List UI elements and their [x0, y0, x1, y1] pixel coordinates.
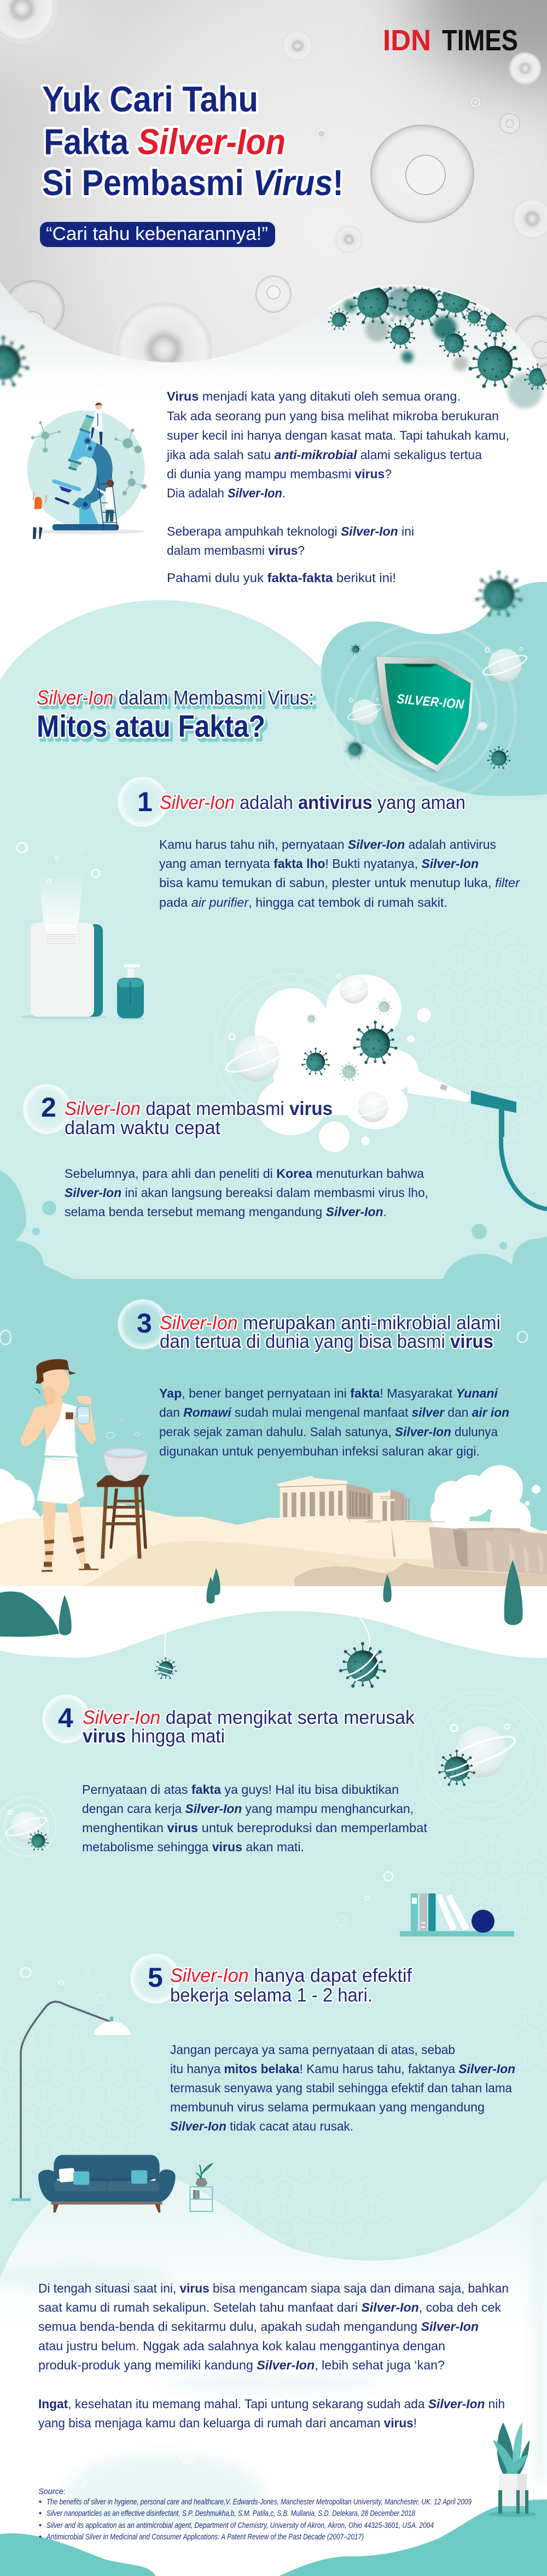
- panel: teal sky section with cloud edges: [0, 1170, 547, 1591]
- illustration: sofa: [38, 2155, 176, 2213]
- cloud: [255, 975, 471, 1152]
- body 5: [170, 2043, 515, 2133]
- icon: planets and viruses: [345, 644, 528, 769]
- bubble: [130, 1953, 181, 2004]
- logo: IDN Times: TIMES: [442, 24, 518, 57]
- body 1: Kamu harus tahu nih, pernyataan Silver-Ion adalah antivirus: [159, 837, 496, 852]
- trees and bush: [0, 1560, 523, 1637]
- head: [34, 1359, 76, 1405]
- scientist woman: [33, 492, 46, 539]
- icon: blurred virus left: [0, 336, 30, 387]
- heading: Silver-Ion dalam Membasmi Virus: Silver-Ion dalam Membasmi Virus:: [37, 686, 314, 709]
- pale bubbles: [0, 2448, 195, 2495]
- heading 5: bekerja selama 1 - 2 hari.: [170, 1985, 373, 2006]
- icon: silver shield: [374, 657, 473, 773]
- heading 2: [65, 1098, 333, 1139]
- source list: Silver and its application as an antimicrobial agent, Department of Chemistry, University of Akron, Akron, Ohio 44325-3601, USA. 2004: [46, 2521, 434, 2530]
- closing text: yang bisa menjaga kamu dan keluarga di rumah dari ancaman virus!: [38, 2416, 417, 2430]
- heading 2: dalam waktu cepat: [65, 1117, 220, 1139]
- heading 3: Silver-Ion merupakan anti-mikrobial alami: [160, 1312, 501, 1334]
- nozzle tag: [440, 1084, 447, 1091]
- closing text: [38, 2281, 509, 2430]
- body 4: [82, 1782, 427, 1854]
- mounds: [294, 1562, 547, 1586]
- legs and sandals: [42, 1499, 98, 1572]
- body 1: [159, 837, 520, 909]
- closing text: semua benda-benda di sekitarmu dulu, apakah sudah mengandung Silver-Ion: [38, 2320, 479, 2334]
- body 3: digunakan untuk penyembuhan infeksi saluran akar gigi.: [159, 1444, 480, 1458]
- bubble: [23, 1084, 71, 1134]
- heading 4: Silver-Ion dapat mengikat serta merusak: [83, 1707, 415, 1728]
- hump highlight edge: [328, 286, 510, 327]
- intro text: Pahami dulu yuk fakta-fakta berikut ini!: [167, 571, 396, 585]
- clouds behind acropolis: [0, 1465, 547, 1542]
- subtitle pill: “Cari tahu kebenarannya!”: [46, 224, 268, 244]
- small bubbles: [17, 843, 100, 884]
- heading 1: Silver-Ion adalah antivirus yang aman: [160, 792, 465, 813]
- closing text: Ingat, kesehatan itu memang mahal. Tapi untung sekarang sudah ada Silver-Ion nih: [38, 2397, 505, 2411]
- source list: Silver nanoparticles as an effective disinfectant, S.P. Deshmukha,b, S.M. Patila,c, S.B. Mullania, S.D. Delekara, 28 December 2018: [46, 2509, 415, 2518]
- hero cells: [0, 0, 547, 400]
- molecules: [31, 421, 146, 495]
- title: Fakta Silver-Ion: [44, 121, 286, 162]
- item 2: [23, 1084, 428, 1219]
- title: [42, 79, 344, 203]
- closing text: produk-produk yang memiliki kandung Silver-Ion, lebih sehat juga ‘kan?: [38, 2358, 445, 2372]
- hexagon patterns: [0, 1831, 547, 2164]
- body 5: termasuk senyawa yang stabil sehingga efektif dan tahan lama: [170, 2081, 513, 2095]
- illustration: acropolis: [276, 1476, 547, 1586]
- body 2: [65, 1166, 428, 1219]
- source list: [38, 2487, 472, 2542]
- holding arm: [74, 1396, 96, 1444]
- illustration: small plant on shelf: [190, 2164, 212, 2211]
- closing text: Di tengah situasi saat ini, virus bisa mengancam siapa saja dan dimana saja, bahkan: [38, 2281, 509, 2296]
- body 2: Silver-Ion ini akan langsung bereaksi dalam membasmi virus lho,: [65, 1186, 428, 1200]
- title: Si Pembasmi Virus!: [42, 162, 344, 203]
- microscope: [53, 415, 119, 530]
- body 4: menghentikan virus untuk bereproduksi dan memperlambat: [82, 1821, 427, 1835]
- temple: [276, 1476, 445, 1557]
- body 3: perak sejak zaman dahulu. Salah satunya, Silver-Ion dulunya: [159, 1424, 498, 1439]
- stool: [97, 1475, 149, 1559]
- heading 3: dan tertua di dunia yang bisa basmi virus: [160, 1331, 493, 1352]
- icon: silver shield: SILVER-ION: [396, 691, 465, 712]
- shield scene: [335, 623, 528, 803]
- body 2: Sebelumnya, para ahli dan peneliti di Korea menuturkan bahwa: [65, 1166, 424, 1181]
- closing text: atau justru belum. Nggak ada salahnya kok kalau menggantinya dengan: [38, 2339, 445, 2353]
- body 3: dan Romawi sudah mulai mengenal manfaat silver dan air ion: [159, 1405, 509, 1419]
- illustration: microscope with scientists: [27, 403, 146, 539]
- item 3: [118, 1299, 509, 1458]
- rings: [0, 1797, 56, 1856]
- panel: white ground band: [0, 1586, 547, 1658]
- body 1: pada air purifier, hingga cat tembok di rumah sakit.: [159, 895, 447, 909]
- illustration: air purifier: [21, 869, 106, 1019]
- illustration: floor lamp: [11, 2002, 131, 2201]
- bubble: [42, 1694, 90, 1744]
- hexagon pattern under sofa: [197, 2164, 394, 2252]
- panel: grey hero background with cells: [0, 0, 547, 400]
- intro text: dalam membasmi virus?: [167, 543, 305, 558]
- intro text: Seberapa ampuhkah teknologi Silver-Ion ini: [167, 524, 414, 538]
- cliff: [429, 1527, 547, 1574]
- body 5: itu hanya mitos belaka! Kamu harus tahu, faktanya Silver-Ion: [170, 2062, 515, 2076]
- body 3: Yap, bener banget pernyataan ini fakta! Masyarakat Yunani: [159, 1386, 498, 1400]
- heading: Silver-Ion dalam Membasmi Virus: Mitos atau Fakta?: [37, 709, 265, 744]
- sphere scene right: [416, 1692, 547, 1823]
- item 4: [42, 1694, 427, 1854]
- number 1: 1: [137, 787, 153, 817]
- toga: [37, 1403, 84, 1504]
- arm and torso: [21, 1394, 64, 1446]
- number 3: 3: [137, 1308, 152, 1339]
- bubble: [118, 777, 168, 827]
- body 5: membunuh virus selama permukaan yang mengandung: [170, 2100, 485, 2114]
- bowl: [104, 1448, 147, 1481]
- hanging viruses: [154, 1614, 386, 1688]
- body 4: dengan cara kerja Silver-Ion yang mampu menghancurkan,: [82, 1802, 414, 1816]
- small rings: [0, 1330, 527, 1345]
- scientist on ladder: [97, 474, 118, 531]
- source list: Source:: [38, 2487, 66, 2496]
- intro text: Dia adalah Silver-Ion.: [167, 486, 286, 500]
- illustration: soap bottle: [116, 964, 144, 1020]
- item 5: [130, 1953, 515, 2133]
- white wave below hero with tinted hump: [0, 281, 547, 448]
- cloud rings: [214, 974, 365, 1125]
- intro text: di dunia yang mampu membasmi virus?: [167, 467, 392, 481]
- small planets: [106, 1418, 139, 1438]
- bottle: [78, 1406, 90, 1424]
- source list: Antimicrobial Silver in Medicinal and Consumer Applications: A Patent Review of the Past Decade (2007–2017): [46, 2533, 364, 2542]
- panel: mint content background: [0, 600, 547, 2576]
- heading: Silver-Ion dalam Membasmi Virus: [37, 686, 314, 744]
- intro text: jika ada salah satu anti-mikrobial alami sekaligus tertua: [166, 448, 482, 462]
- illustration: sprayer cloud: [214, 974, 547, 1209]
- heading 4: [83, 1707, 415, 1747]
- title: Yuk Cari Tahu: [42, 79, 258, 119]
- body 5: Jangan percaya ya sama pernyataan di atas, sebab: [170, 2043, 455, 2057]
- cloud viruses and planets: [223, 974, 398, 1122]
- heading 3: [160, 1312, 501, 1352]
- sphere scene left: [0, 1797, 56, 1856]
- body 1: yang aman ternyata fakta lho! Bukti nyatanya, Silver-Ion: [159, 856, 479, 871]
- logo: IDN Times: IDN: [383, 24, 431, 57]
- illustration: greek man with bowl and stool: [21, 1359, 149, 1572]
- scientist on top: [91, 403, 103, 445]
- bottom waves: [0, 2499, 547, 2576]
- body 3: [159, 1386, 509, 1458]
- number 2: 2: [41, 1092, 56, 1123]
- heading 5: Silver-Ion hanya dapat efektif: [170, 1965, 412, 1986]
- small bubbles item 5: [21, 1968, 105, 2003]
- closing text: saat kamu di rumah sekalipun. Setelah tahu manfaat dari Silver-Ion, coba deh cek: [38, 2300, 501, 2314]
- virus cluster inside hump: [328, 278, 547, 408]
- shield rings: [335, 623, 515, 803]
- sprayer head and cable: [471, 1090, 547, 1209]
- body 4: Pernyataan di atas fakta ya guys! Hal itu bisa dibuktikan: [82, 1782, 399, 1797]
- heading 5: [170, 1965, 412, 2006]
- body 2: selama benda tersebut memang mengandung Silver-Ion.: [65, 1205, 387, 1219]
- intro text: Virus menjadi kata yang ditakuti oleh semua orang.: [167, 389, 461, 403]
- body 5: Silver-Ion tidak cacat atau rusak.: [170, 2119, 353, 2133]
- logo: IDN Times: [383, 24, 518, 57]
- intro text: Tak ada seorang pun yang bisa melihat mikroba berukuran: [167, 409, 499, 423]
- heading 2: Silver-Ion dapat membasmi virus: [65, 1098, 333, 1119]
- hexagon pattern right of cloud: [418, 921, 547, 1156]
- rings: [416, 1692, 547, 1823]
- body 1: bisa kamu temukan di sabun, plester untuk menutup luka, filter: [159, 876, 520, 890]
- intro text: [166, 389, 509, 585]
- panel: white closing blob: [0, 2164, 547, 2576]
- panel: teal shield blob: [321, 582, 547, 796]
- bubble: [118, 1299, 168, 1349]
- heading 4: virus hingga mati: [83, 1726, 225, 1747]
- body 4: metabolisme sehingga virus akan mati.: [82, 1840, 304, 1854]
- icon: large blurred virus top right: [475, 571, 522, 617]
- bookshelf: [337, 1872, 514, 1937]
- pale washes: [0, 2208, 547, 2531]
- number 4: 4: [58, 1703, 73, 1733]
- item 1: [118, 777, 520, 909]
- illustration: potted plant: [488, 2422, 537, 2517]
- number 5: 5: [148, 1962, 163, 1993]
- intro text: super kecil ini hanya dengan kasat mata. Tapi tahukah kamu,: [167, 429, 509, 443]
- land: Greek landscape: [0, 1504, 547, 1588]
- bullets: [39, 2501, 42, 2538]
